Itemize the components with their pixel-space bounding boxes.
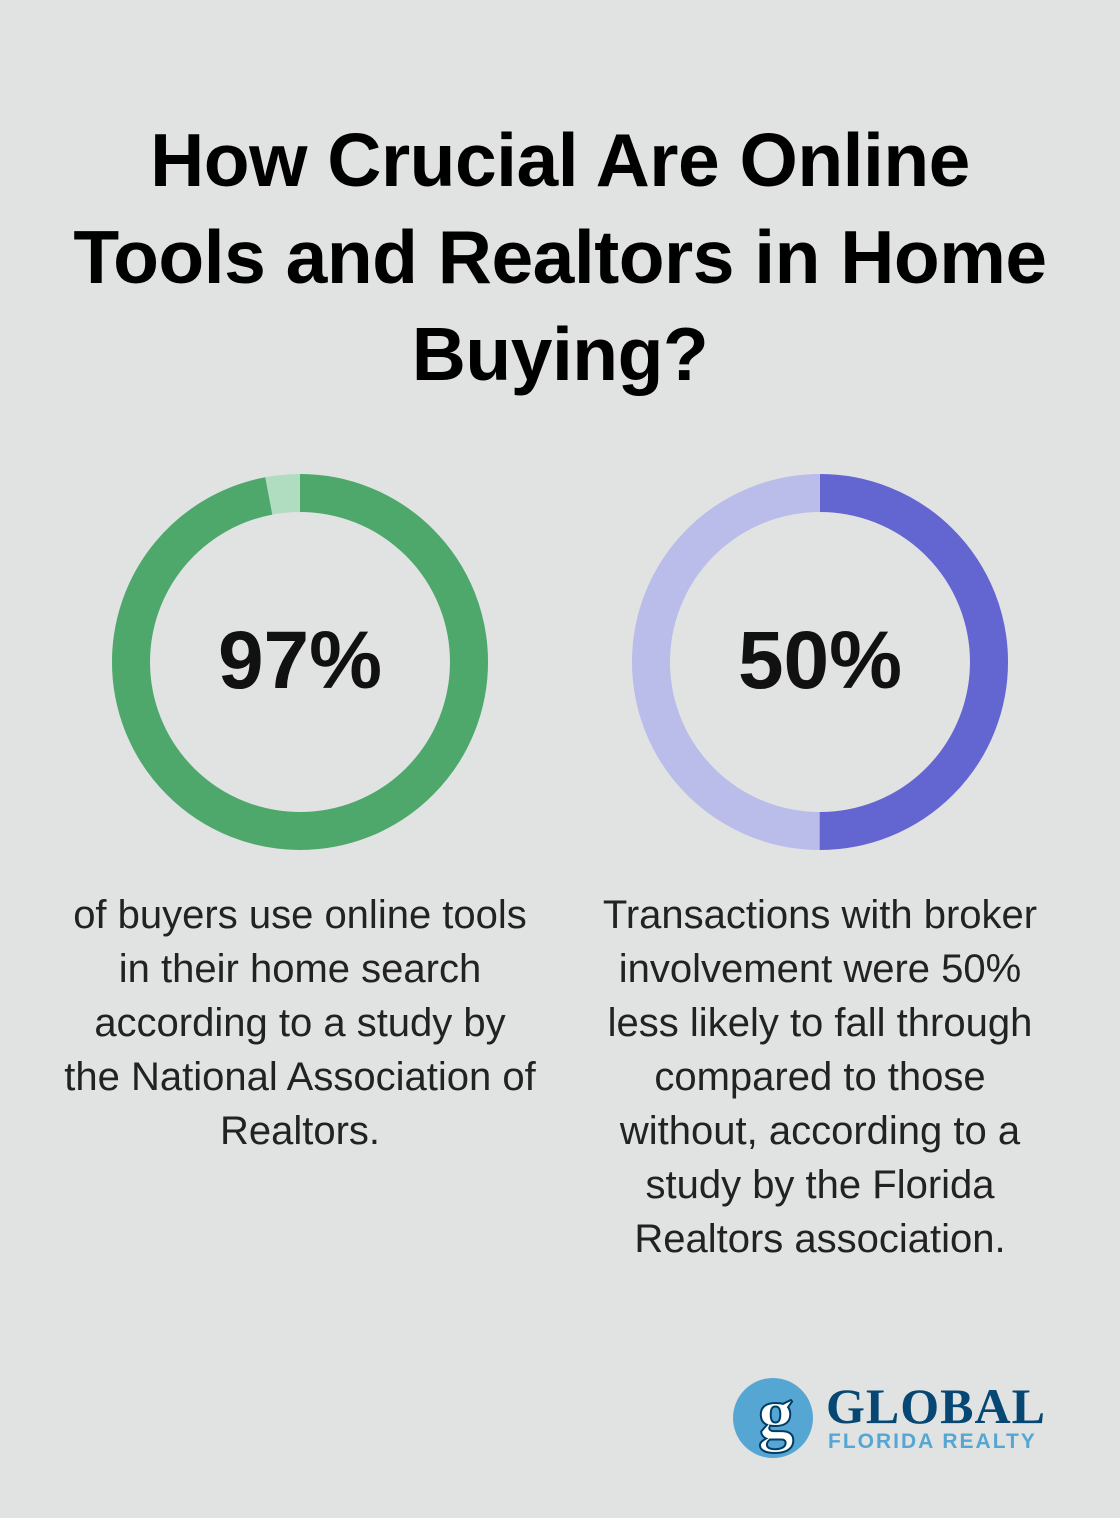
donut chart: 97%: 97% <box>218 615 382 706</box>
text: broker stat <box>603 893 1037 1261</box>
text: online tools stat: Realtors. <box>220 1109 380 1153</box>
text: online tools stat <box>64 893 536 1153</box>
logo <box>733 1377 1046 1458</box>
text: broker stat: less likely to fall through <box>608 1001 1032 1045</box>
icon: g circle <box>733 1377 813 1458</box>
text: broker stat: without, according to a <box>620 1109 1020 1153</box>
text: online tools stat: in their home search <box>119 947 481 991</box>
text: online tools stat: the National Association of <box>64 1055 536 1099</box>
text: broker stat: study by the Florida <box>645 1163 995 1207</box>
title <box>73 118 1047 396</box>
title: How Crucial Are Online <box>150 118 970 202</box>
text: online tools stat: according to a study by <box>94 1001 506 1045</box>
title: Buying? <box>412 312 708 396</box>
text: broker stat: Realtors association. <box>634 1217 1006 1261</box>
donut chart: 50% <box>632 474 1008 850</box>
text: broker stat: involvement were 50% <box>619 947 1021 991</box>
logo: GLOBAL <box>826 1378 1046 1434</box>
text: broker stat: Transactions with broker <box>603 893 1037 937</box>
title: Tools and Realtors in Home <box>73 215 1047 299</box>
logo: FLORIDA REALTY <box>828 1430 1037 1453</box>
donut chart: 97% <box>112 474 488 850</box>
text: online tools stat: of buyers use online tools <box>73 893 527 937</box>
text: broker stat: compared to those <box>654 1055 986 1099</box>
donut chart: 50%: 50% <box>738 615 902 706</box>
